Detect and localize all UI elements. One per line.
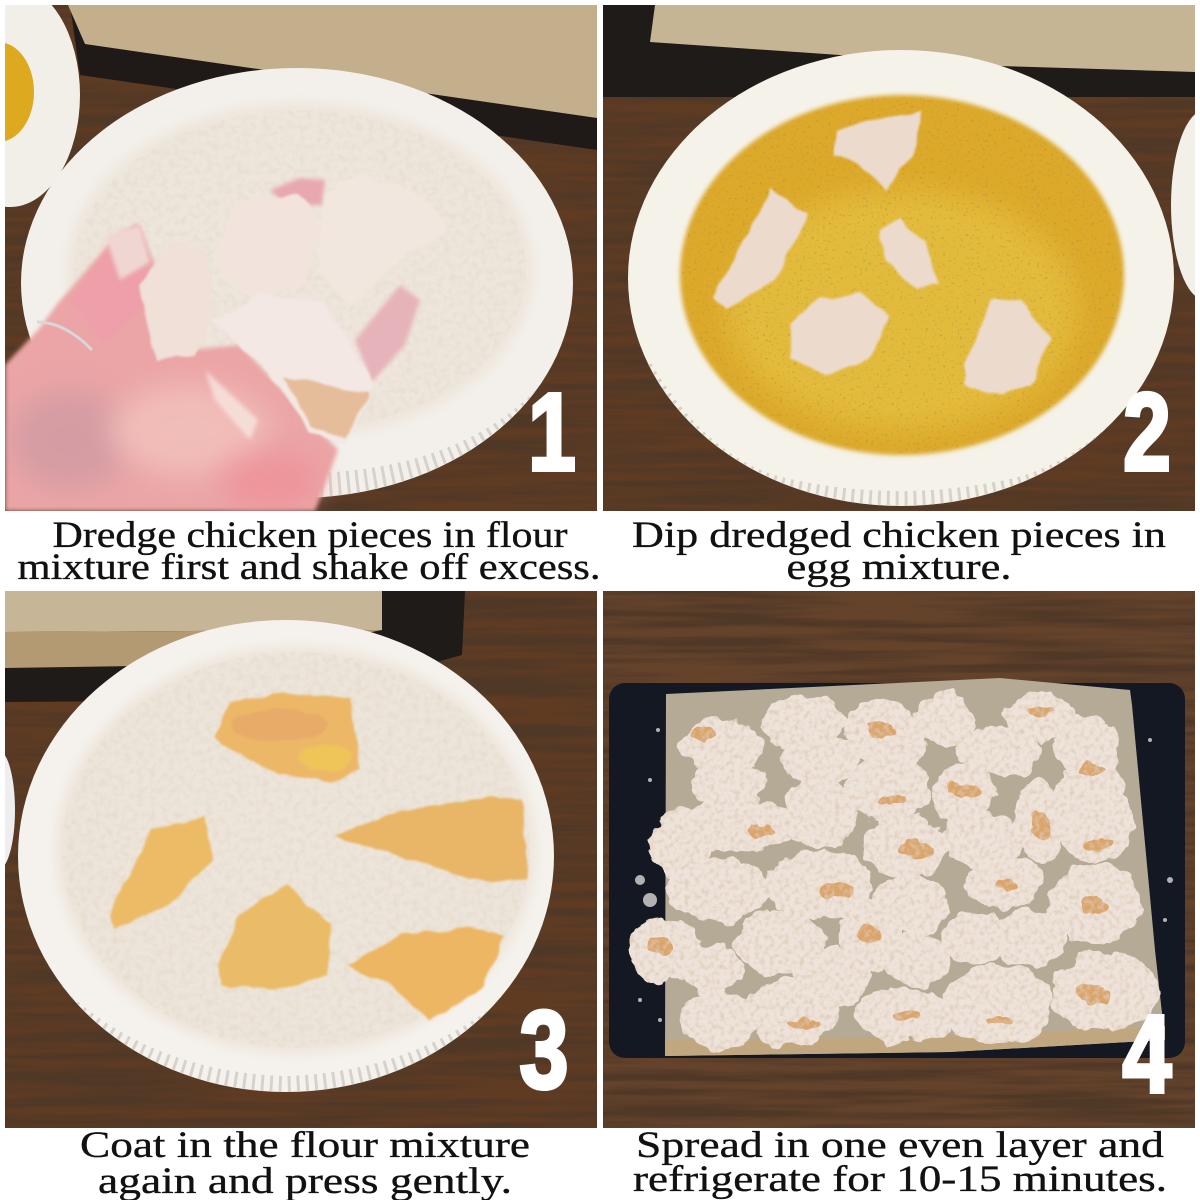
step number 3: 3 [520,990,568,1112]
flour coated chicken pieces [140,175,448,445]
caption 1: Dredge chicken pieces in flour [52,515,568,556]
caption 4: refrigerate for 10-15 minutes. [633,1159,1167,1200]
caption 2: egg mixture. [786,547,1012,588]
side bowl [5,756,15,865]
egg mixture [680,95,1125,457]
side bowl with egg [0,0,80,207]
white bowl [21,68,573,498]
wood table [5,591,597,1128]
caption 1 [18,515,600,588]
wood table [5,5,597,511]
step number 4: 4 [1123,994,1171,1116]
caption 2: Dip dredged chicken pieces in [632,515,1166,556]
white bowl [18,620,554,1092]
flour [56,646,536,1054]
parchment [665,678,1165,1056]
wood table [603,591,1195,1128]
panel 1: dredging chicken in flour [0,0,597,511]
caption 4 [633,1125,1167,1200]
caption 2 [632,515,1166,588]
caption 1: mixture first and shake off excess. [18,547,600,588]
wood table [603,97,1195,511]
caption 3: Coat in the flour mixture [80,1125,530,1166]
caption 3 [80,1125,530,1200]
ring [37,322,92,350]
baking tray with parchment [68,5,597,150]
panel 3: coating in flour again [0,591,597,1128]
step number 1: 1 [528,371,576,493]
baking tray with parchment [5,591,465,702]
egg coated chicken pieces [110,692,528,1020]
flour [66,102,534,438]
flour on tray [635,728,1173,1022]
navy baking tray [609,683,1185,1058]
step number 2: 2 [1123,371,1171,493]
dipped chicken pieces [714,110,1050,395]
baking tray with parchment [603,5,1195,97]
panel 2: chicken in egg mixture [603,5,1200,511]
side bowl [1171,114,1195,296]
panel 4: chicken spread on tray [603,591,1195,1128]
coated chicken pieces [629,685,1159,1050]
hand [5,178,420,511]
white bowl [628,50,1174,506]
caption 4: Spread in one even layer and [636,1125,1165,1166]
